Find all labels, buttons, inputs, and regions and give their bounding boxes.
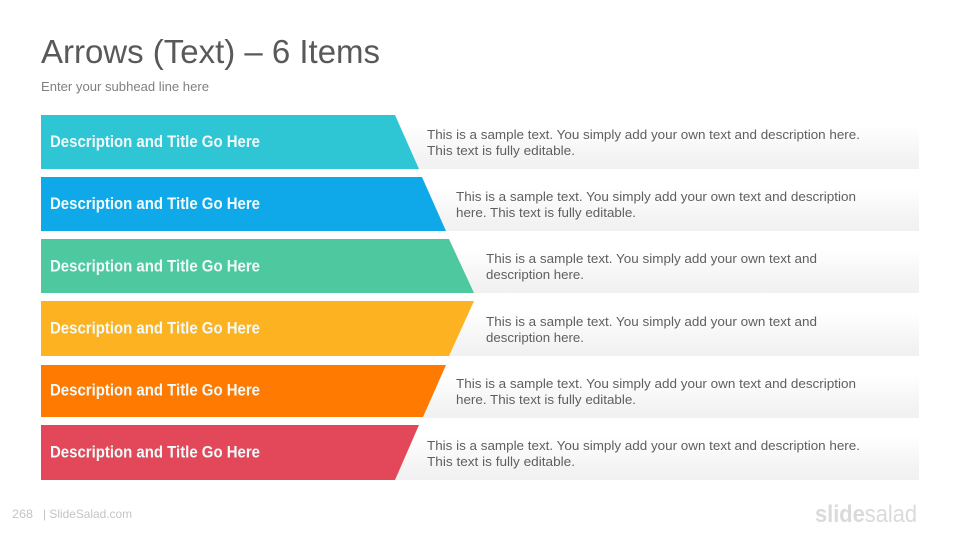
title: Arrows (Text) – 6 Items (41, 33, 380, 70)
row 5 description (456, 376, 856, 407)
row 3 heading: Description and Title Go Here (50, 256, 260, 276)
row 1 heading: Description and Title Go Here (50, 132, 260, 151)
row 1 text background (395, 115, 919, 169)
row 6 description (427, 438, 860, 469)
row 6 arrow band (41, 425, 419, 480)
row 2 text background (422, 177, 919, 231)
row 4 description (486, 314, 817, 345)
row 2 description: here. This text is fully editable. (456, 205, 636, 220)
row 1 (41, 115, 919, 169)
row 6 heading: Description and Title Go Here (50, 442, 260, 462)
row 5 text background (423, 365, 919, 418)
row 6 description: This text is fully editable. (427, 454, 575, 469)
row 4 (41, 301, 919, 356)
row 3 text background (449, 239, 919, 293)
row 3 (41, 239, 919, 293)
row 4 text background (449, 301, 919, 356)
row 2 heading: Description and Title Go Here (50, 194, 260, 213)
row 5 description: here. This text is fully editable. (456, 392, 636, 407)
row 4 description: description here. (486, 330, 584, 345)
row 6 (41, 425, 919, 480)
row 1 description (427, 127, 860, 158)
row 4 description: This is a sample text. You simply add your own text and (486, 314, 817, 329)
row 1 arrow band (41, 115, 419, 169)
row 4 heading: Description and Title Go Here (50, 318, 260, 338)
row 2 description: This is a sample text. You simply add your own text and description (456, 189, 856, 204)
row 6 text background (395, 425, 919, 480)
row 5 heading: Description and Title Go Here (50, 380, 260, 400)
row 5 arrow band (41, 365, 446, 417)
row 5 description: This is a sample text. You simply add your own text and description (456, 376, 856, 391)
row 3 arrow band (41, 239, 474, 293)
row 2 arrow band (41, 177, 446, 231)
row 1 description: This text is fully editable. (427, 143, 575, 158)
row 6 description: This is a sample text. You simply add your own text and description here. (427, 438, 860, 453)
row 3 description: description here. (486, 267, 584, 282)
footer site name: | SlideSalad.com (43, 507, 132, 521)
row 1 description: This is a sample text. You simply add your own text and description here. (427, 127, 860, 142)
row 2 (41, 177, 919, 231)
row 5 (41, 365, 919, 418)
row 3 description (486, 251, 817, 282)
subhead: Enter your subhead line here (41, 79, 209, 94)
row 4 arrow band (41, 301, 474, 356)
logo wordmark: slidesalad (815, 501, 917, 528)
row 3 description: This is a sample text. You simply add your own text and (486, 251, 817, 266)
row 2 description (456, 189, 856, 220)
page number: 268 (12, 507, 33, 521)
